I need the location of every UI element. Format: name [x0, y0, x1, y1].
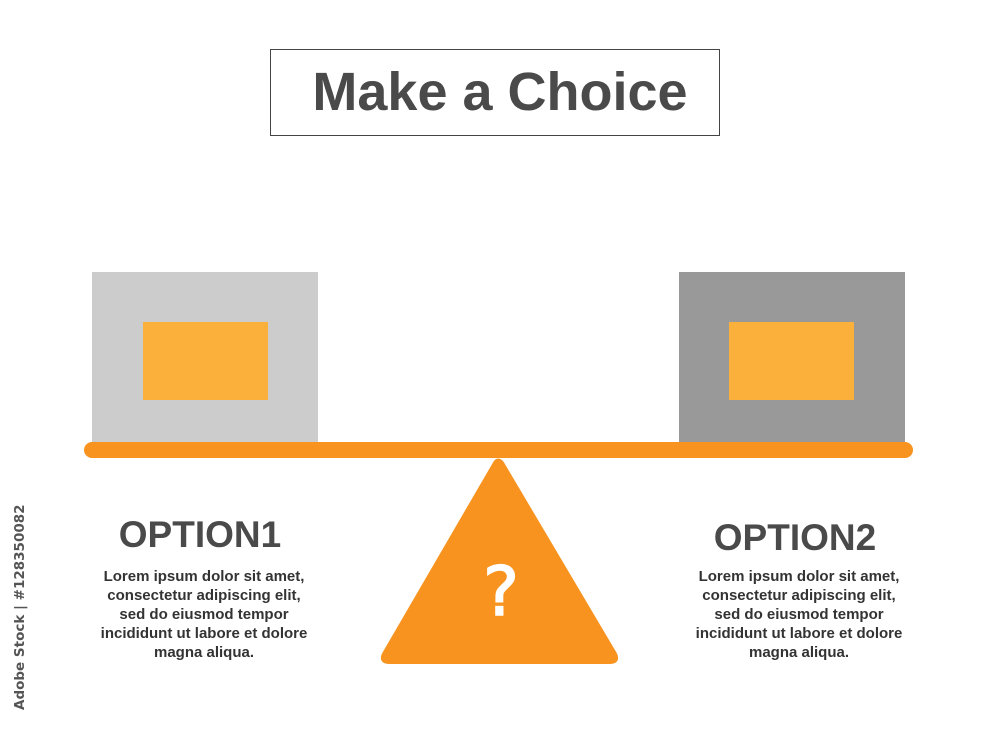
- fulcrum triangle with question mark: [380, 458, 618, 664]
- option 2 heading: OPTION2: [714, 517, 876, 558]
- option 1 text: Lorem ipsum dolor sit amet,: [104, 568, 304, 585]
- right box: option 2 weight: [679, 272, 905, 443]
- option 1 text: sed do eiusmod tempor: [119, 606, 289, 623]
- option 1 text: consectetur adipiscing elit,: [107, 587, 301, 604]
- seesaw beam: [84, 442, 913, 458]
- title: [270, 49, 720, 136]
- option 2 text: incididunt ut labore et dolore: [696, 625, 902, 642]
- option 1 text: [101, 568, 307, 661]
- option 2 text: magna aliqua.: [749, 644, 849, 661]
- option 1 text: magna aliqua.: [154, 644, 254, 661]
- option 2 text: [696, 568, 902, 661]
- title: Make a Choice: [312, 62, 688, 122]
- left inner orange rectangle: [143, 322, 268, 400]
- right inner orange rectangle: [729, 322, 854, 400]
- left box: option 1 weight: [92, 272, 318, 443]
- option 1 text: incididunt ut labore et dolore: [101, 625, 307, 642]
- option 2 text: sed do eiusmod tempor: [714, 606, 884, 623]
- option 2 text: consectetur adipiscing elit,: [702, 587, 896, 604]
- option 1 heading: OPTION1: [119, 514, 281, 555]
- fulcrum triangle with question mark: ?: [483, 553, 519, 632]
- watermark vertical text: Adobe Stock | #128350082: [12, 504, 28, 710]
- option 2 text: Lorem ipsum dolor sit amet,: [699, 568, 899, 585]
